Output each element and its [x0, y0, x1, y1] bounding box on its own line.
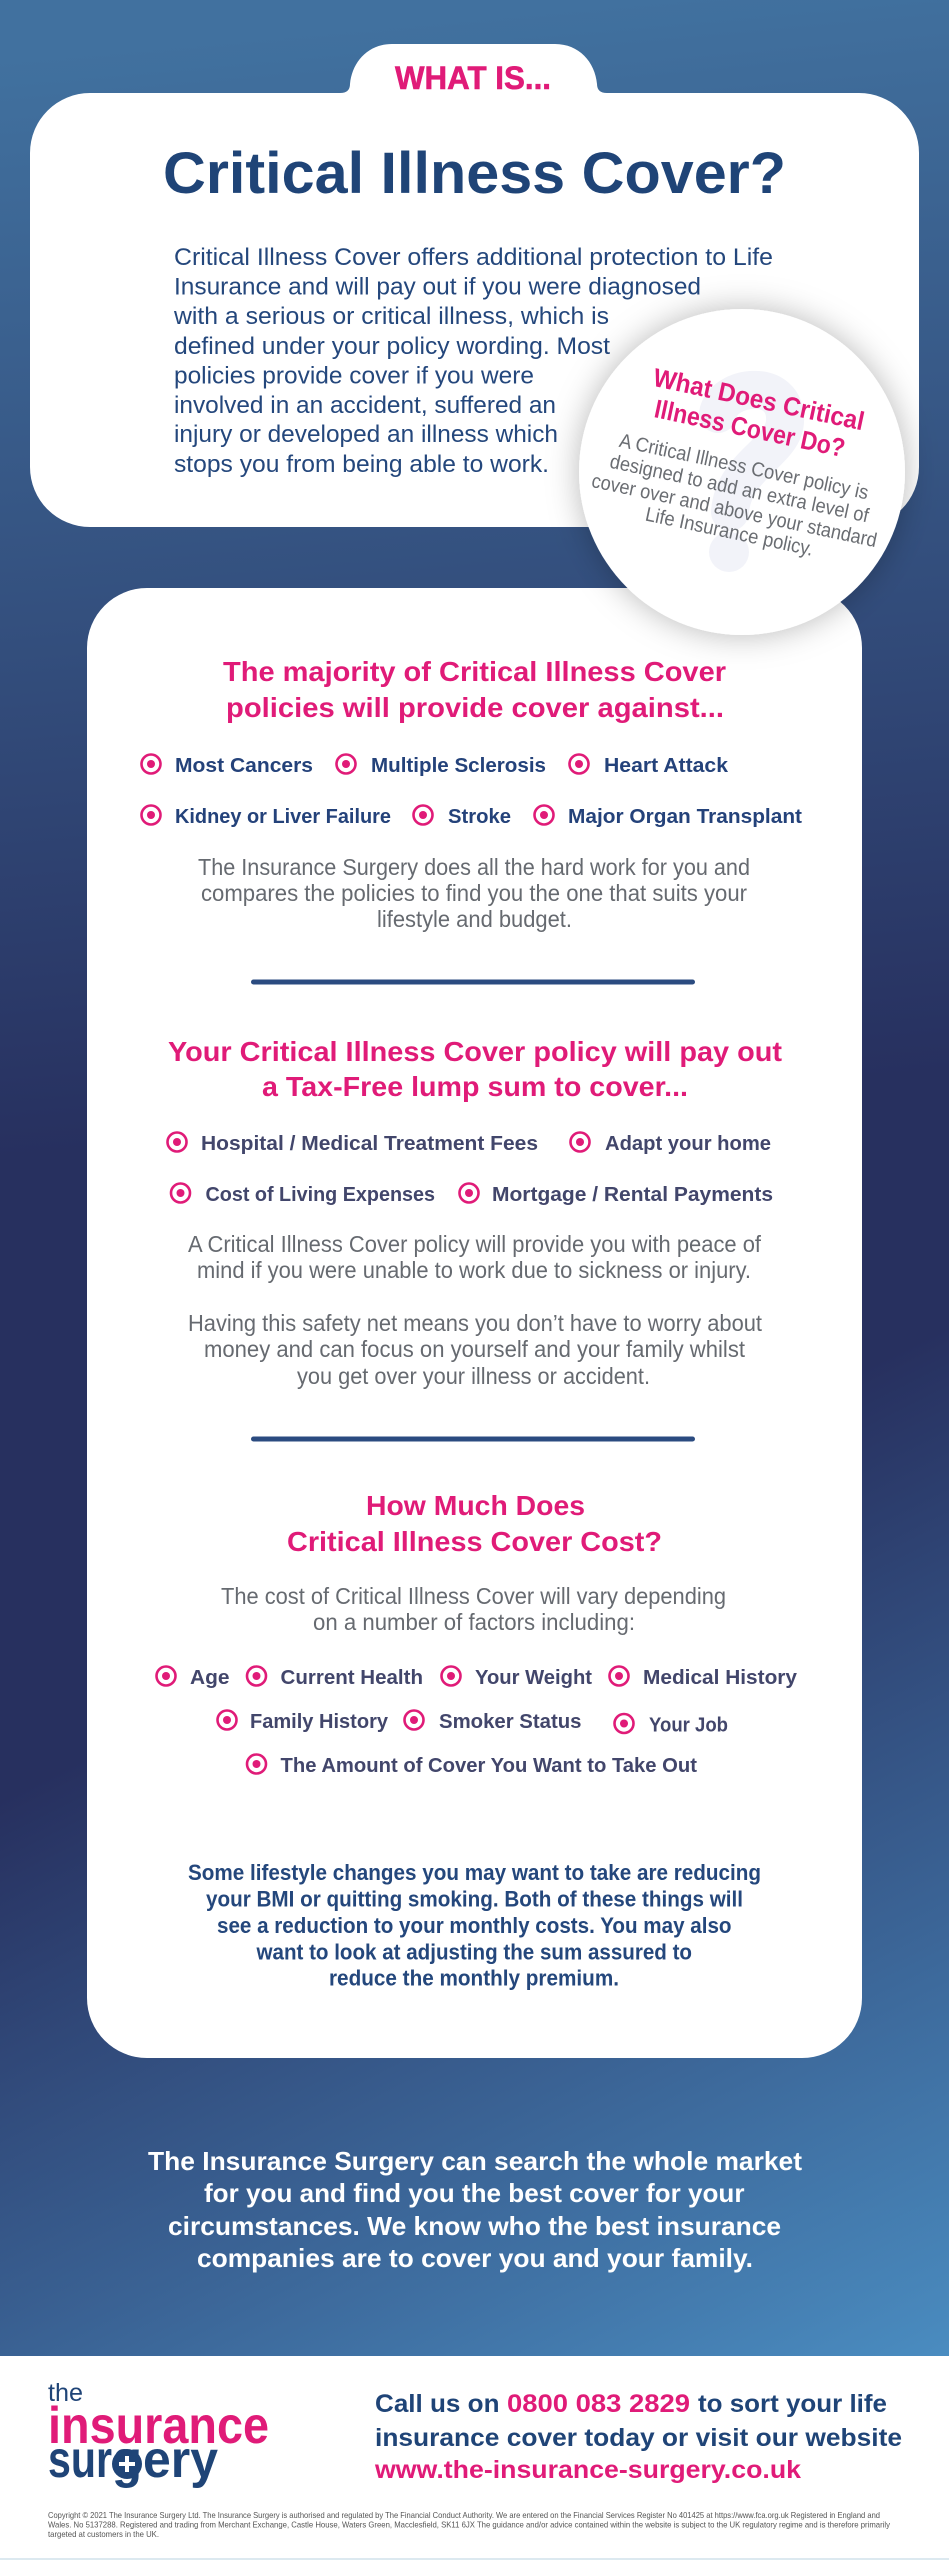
list: conditions covered: Kidney or Liver Failure [175, 806, 391, 828]
title: Critical Illness Cover? [163, 141, 786, 206]
heading: how much does it cost: Critical Illness Cover Cost? [287, 1526, 662, 1557]
callout: lifestyle changes: see a reduction to your monthly costs. You may also [217, 1913, 732, 1938]
list: cost factors: Age [190, 1667, 230, 1689]
heading: tax-free lump sum [168, 1036, 782, 1102]
callout text [590, 430, 879, 561]
heading: majority of policies [223, 656, 726, 723]
call to action: 0800 083 2829 [507, 2390, 690, 2418]
intro paragraph: defined under your policy wording. Most [174, 333, 610, 360]
heading: majority of policies: The majority of Critical Illness Cover [223, 656, 726, 687]
paragraph: cost factors intro: on a number of factors including: [313, 1609, 635, 1635]
list: what the lump sum covers [168, 1132, 773, 1206]
callout: lifestyle changes: want to look at adjusting the sum assured to [256, 1940, 692, 1964]
closing statement [148, 2146, 802, 2273]
footer panel [0, 2356, 949, 2560]
list: cost factors: The Amount of Cover You Want to Take Out [280, 1755, 697, 1777]
callout text: A Critical Illness Cover policy is [617, 430, 870, 504]
paragraph: safety net: you get over your illness or accident. [297, 1363, 650, 1389]
paragraph: cost factors intro [221, 1583, 726, 1635]
intro paragraph: injury or developed an illness which [174, 421, 558, 448]
closing statement: circumstances. We know who the best insurance [168, 2211, 781, 2241]
callout heading: Illness Cover Do? [652, 393, 848, 463]
heading: majority of policies: policies will provide cover against... [226, 692, 724, 723]
paragraph: peace of mind [188, 1231, 762, 1283]
intro paragraph: stops you from being able to work. [174, 451, 549, 478]
intro paragraph: with a serious or critical illness, which is [173, 303, 609, 330]
list: what the lump sum covers: Hospital / Medical Treatment Fees [201, 1133, 538, 1155]
list: cost factors [156, 1666, 798, 1777]
paragraph: safety net: money and can focus on yourself and your family whilst [204, 1336, 746, 1362]
list: conditions covered: Multiple Sclerosis [371, 755, 546, 777]
panel: what is critical illness cover [30, 44, 919, 527]
list: what the lump sum covers: Adapt your home [605, 1133, 771, 1155]
paragraph: safety net: Having this safety net means you don’t have to worry about [188, 1310, 763, 1336]
paragraph: peace of mind: A Critical Illness Cover policy will provide you with peace of [188, 1231, 762, 1257]
heading: tax-free lump sum: Your Critical Illness Cover policy will pay out [168, 1036, 782, 1067]
list: conditions covered: Stroke [448, 806, 511, 828]
logo: the insurance surgery: insurance [48, 2397, 269, 2455]
closing statement: The Insurance Surgery can search the whole market [148, 2146, 802, 2176]
heading: how much does it cost: How Much Does [366, 1490, 585, 1521]
paragraph: does the hard work [198, 854, 750, 932]
callout: lifestyle changes: Some lifestyle changes you may want to take are reducing [188, 1860, 761, 1885]
callout: lifestyle changes: your BMI or quitting smoking. Both of these things will [206, 1886, 743, 1912]
panel: main content card [87, 588, 862, 2058]
callout text: cover over and above your standard [590, 470, 879, 552]
icon: question mark watermark [709, 390, 785, 572]
callout: lifestyle changes [188, 1860, 761, 1990]
heading: tax-free lump sum: a Tax-Free lump sum to cover... [262, 1071, 688, 1102]
tab label: what is: WHAT IS... [395, 60, 551, 96]
paragraph: does the hard work: compares the policies to find you the one that suits your [201, 880, 747, 906]
list: conditions covered: Most Cancers [175, 755, 313, 777]
callout circle: what does critical illness cover do [579, 309, 905, 635]
call to action: insurance cover today or visit our website [375, 2424, 902, 2452]
callout text: Life Insurance policy. [643, 504, 815, 561]
call to action: Call us on [375, 2390, 500, 2418]
list: cost factors: Your Weight [475, 1667, 592, 1689]
logo: the insurance surgery: g [112, 2431, 142, 2489]
paragraph: does the hard work: lifestyle and budget. [377, 906, 572, 932]
intro paragraph [173, 244, 773, 478]
closing statement: for you and find you the best cover for your [204, 2178, 744, 2208]
logo: the insurance surgery [48, 2379, 269, 2489]
call to action: to sort your life [698, 2390, 887, 2418]
intro paragraph: Insurance and will pay out if you were diagnosed [174, 274, 701, 300]
paragraph: safety net [188, 1310, 763, 1389]
list: conditions covered: Heart Attack [604, 755, 729, 777]
paragraph: peace of mind: mind if you were unable to work due to sickness or injury. [197, 1257, 751, 1283]
callout heading: What Does Critical [651, 362, 867, 436]
list: what the lump sum covers: Cost of Living Expenses [206, 1184, 435, 1206]
list: conditions covered: Major Organ Transplant [568, 806, 802, 828]
logo: the insurance surgery: sur [48, 2431, 112, 2489]
list: cost factors: Current Health [280, 1667, 423, 1689]
list: cost factors: Smoker Status [439, 1711, 582, 1733]
paragraph: cost factors intro: The cost of Critical Illness Cover will vary depending [221, 1583, 726, 1609]
list: cost factors: Your Job [649, 1714, 728, 1736]
logo: the insurance surgery: the [48, 2379, 83, 2407]
callout text: designed to add an extra level of [608, 451, 871, 527]
copyright text: targeted at customers in the UK. [48, 2529, 159, 2539]
heading: how much does it cost [287, 1490, 662, 1557]
list: cost factors: Family History [250, 1711, 389, 1733]
callout: lifestyle changes: reduce the monthly premium. [329, 1966, 619, 1990]
call to action [374, 2390, 902, 2484]
intro paragraph: policies provide cover if you were [174, 362, 534, 390]
intro paragraph: Critical Illness Cover offers additional protection to Life [174, 244, 773, 271]
copyright text [48, 2510, 891, 2539]
list: cost factors: Medical History [643, 1667, 798, 1689]
logo: the insurance surgery: ery [143, 2431, 218, 2489]
list: conditions covered [142, 754, 802, 828]
closing statement: companies are to cover you and your family. [197, 2243, 753, 2273]
call to action: www.the-insurance-surgery.co.uk [374, 2456, 801, 2484]
paragraph: does the hard work: The Insurance Surgery does all the hard work for you and [198, 854, 750, 880]
list: what the lump sum covers: Mortgage / Rental Payments [492, 1184, 773, 1206]
intro paragraph: involved in an accident, suffered an [174, 392, 556, 419]
copyright text: Wales. No 5137288. Registered and trading from Merchant Exchange, Castle House, Waters Green, Macclesfield, SK11 6JX The guidance and/or advice contained within the website is subject to the UK regulatory regime and is therefore primarily [48, 2520, 891, 2530]
